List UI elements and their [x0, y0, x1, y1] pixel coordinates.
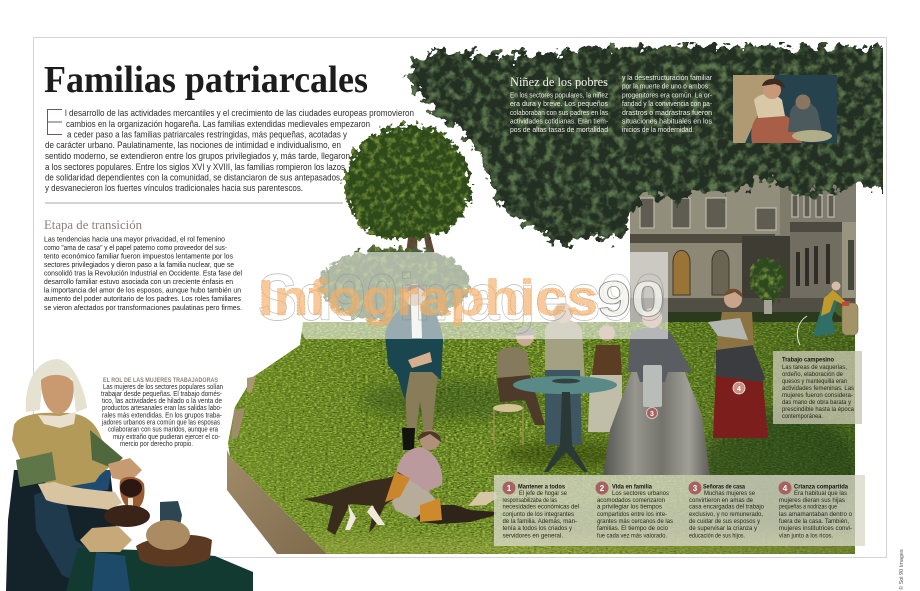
box: Trabajo campesino: [773, 351, 862, 424]
body: trabajar desde pequeñas. El trabajo domés-: [101, 391, 222, 398]
box body: das mano de obra barata y: [782, 399, 852, 406]
item 4: Crianza compartida: vían junto a los ricos.: [779, 532, 833, 540]
item 2: Vida en familia: familias. El tiempo de ocio: [597, 525, 668, 532]
section body: consolidó tras la Revolución Industrial en Occidente. Esta fase del: [44, 268, 242, 278]
pan: [104, 505, 150, 527]
item 3: Señoras de casa: educación de sus hijos.: [689, 532, 745, 540]
section body: aumento del poder autoritario de los padres. Los roles familiares: [44, 294, 241, 303]
soil cliff: [227, 376, 327, 554]
item 4: Crianza compartida: mujeres institutrices convi-: [779, 525, 852, 532]
box body: Las tareas de vaquerías,: [782, 364, 847, 371]
item 3: Señoras de casa: [688, 482, 764, 540]
item 1: Mantener a todos: conjunto de los integrantes: [502, 511, 575, 518]
skirt: [6, 470, 118, 591]
section body: se vieron afectados por transformaciones paulatinas pero firmes.: [44, 303, 242, 312]
item 2: Vida en familia: 2: [600, 484, 605, 493]
box body: [782, 364, 855, 420]
item 4: Crianza compartida: pequeñas a nodrizas que: [779, 504, 837, 511]
column two: progenitores era común. La or-: [622, 90, 713, 100]
item 1: Mantener a todos: El jefe de hogar se: [519, 490, 567, 497]
section body: Las tendencias hacia una mayor privacidad, el rol femenino: [44, 234, 225, 244]
item 2: Vida en familia: Vida en familia: [612, 484, 652, 490]
box body: mujeres fueron considera-: [782, 392, 853, 399]
box body: actividades femeninas. Las: [782, 385, 855, 392]
bushes along the wall: [668, 258, 858, 325]
box body: prescindible hasta la época: [782, 406, 854, 413]
item 3: Señoras de casa: exclusivo, y no remunerado,: [689, 511, 763, 518]
intro text block: a ceder paso a las familias patriarcales restringidas, más pequeñas, acotadas y: [67, 130, 347, 140]
item 3: Señoras de casa: 3: [693, 484, 698, 493]
watermark: translucent band: [296, 252, 668, 339]
painting: mother and child: [733, 75, 837, 143]
box: Trabajo campesino: Trabajo campesino: [782, 356, 834, 364]
item 3: Señoras de casa: convirtieron en amas de: [689, 497, 753, 504]
man standing: [385, 284, 443, 450]
basket: [136, 535, 212, 567]
drop cap: [48, 110, 62, 134]
body: tico, las actividades de hilado o la venta de: [102, 398, 222, 405]
item 4: Crianza compartida: 4: [783, 484, 788, 493]
item 1: Mantener a todos: Mantener a todos: [518, 484, 565, 490]
item 1: Mantener a todos: tenía a todos los criados y: [502, 525, 573, 532]
item 4: Crianza compartida: fuera de la casa. También,: [779, 518, 849, 525]
lawn: [228, 322, 900, 556]
intro text block: cambios en la organización hogareña. Las familias extendidas medievales empezaron: [66, 119, 370, 129]
item 1: Mantener a todos: necesidades económicas del: [502, 504, 579, 511]
column two: drastros o madrastras fueron: [622, 108, 712, 117]
body: [101, 384, 223, 448]
section body: [44, 234, 242, 312]
item 1: Mantener a todos: responsabilizaba de las: [502, 497, 558, 504]
column one: colaboraban con sus padres en las: [510, 108, 608, 117]
section body: la importancia del amor de los esposos, aunque hubo también un: [44, 286, 241, 294]
section heading: Etapa de transición: [44, 217, 142, 232]
arched windows: [673, 240, 854, 295]
item 3: Señoras de casa: casa encargadas del trabajo: [689, 504, 764, 511]
section: El rol de las mujeres trabajadoras: [101, 377, 223, 448]
body: muy extraño que pudieran ejercer el co-: [113, 434, 220, 441]
item 3: Señoras de casa: de supervisar la crianza y: [689, 525, 758, 532]
item 4: Crianza compartida: Era habitual que las: [794, 490, 848, 497]
intro text block: l desarrollo de las actividades mercantiles y el crecimiento de las ciudades europeas promovieron: [65, 108, 414, 118]
illustration: garden scene: [227, 46, 900, 556]
section: Niñez de los pobres: [510, 73, 713, 134]
blue pitcher: [160, 501, 182, 526]
section body: como "ama de casa" y el papel paterno como proveedor del sus-: [44, 243, 227, 252]
item 1: Mantener a todos: 1: [507, 484, 512, 493]
box: four family roles: [494, 475, 865, 546]
item 2: Vida en familia: a privilegiar los tiempos: [597, 504, 663, 511]
item 2: Vida en familia: Los sectores urbanos: [612, 490, 670, 497]
box body: ordeño, elaboración de: [782, 371, 843, 378]
bodice: [12, 413, 120, 488]
item 1: Mantener a todos: de la familia. Además, man-: [502, 518, 577, 525]
table: [66, 548, 253, 591]
background hedges: [320, 247, 470, 323]
column one: En los sectores populares, la niñez: [510, 90, 608, 100]
title: Familias patriarcales: [44, 59, 368, 101]
section: Etapa de transición: [44, 217, 242, 312]
item 2: Vida en familia: [596, 482, 674, 540]
box body: quesos y mantequilla eran: [782, 378, 847, 385]
pointer arrow: [797, 316, 807, 345]
column one: pos de altas tasas de mortalidad: [510, 125, 608, 134]
woman in grey dress: [603, 308, 710, 475]
woman in red dress: 4: [737, 386, 741, 393]
illustration: milkmaid: [6, 359, 253, 591]
heading: EL ROL DE LAS MUJERES TRABAJADORAS: [103, 377, 218, 384]
body: jadores urbanos era común que las esposas: [101, 420, 220, 426]
girl and dogs: [302, 430, 497, 535]
section body: desarrollo familiar estuvo asociada con un creciente énfasis en: [44, 277, 233, 286]
body: rales más extendidas. En los grupos traba-: [102, 412, 222, 420]
sleeves: [16, 452, 56, 487]
intro text block: de carácter urbano. Paulatinamente, las nociones de intimidad e individualismo, en: [45, 140, 341, 150]
item 4: Crianza compartida: mujeres dieran sus hijas: [779, 497, 846, 504]
intro text block: [45, 108, 414, 193]
column two: por la muerte de uno o ambos: [622, 82, 708, 90]
section body: tento económico familiar fueron impuestos lentamente por los: [44, 252, 233, 260]
item 2: Vida en familia: grantes más cercanos de las: [597, 518, 674, 525]
column one: actividades cotidianas. Eran tiem-: [510, 116, 609, 126]
watermark text: 90: [597, 271, 665, 327]
jug: [120, 477, 144, 510]
arms: [38, 482, 122, 510]
column two: situaciones habituales en los: [622, 116, 712, 126]
woman in red dress: [708, 289, 768, 438]
face: [41, 375, 74, 414]
item 4: Crianza compartida: [778, 482, 852, 540]
item 4: Crianza compartida: las amamantaban dentro o: [779, 511, 852, 518]
canopy: [410, 46, 890, 250]
heading: Niñez de los pobres: [510, 74, 608, 89]
building windows: [640, 195, 834, 230]
woman in grey dress: 3: [650, 411, 654, 418]
item 4: Crianza compartida: Crianza compartida: [794, 484, 848, 490]
intro text block: y desvanecieron los fuertes vínculos tradicionales hacia sus parentescos.: [45, 183, 303, 193]
item 1: Mantener a todos: servidores en general.: [502, 532, 563, 540]
intro text block: sentido moderno, se extendieron entre los grupos privilegiados y, más tarde, llegaron: [45, 151, 350, 161]
body: colaboraran con sus maridos, aunque era: [108, 426, 218, 434]
body: productos artesanales eran las salidas labo-: [102, 405, 222, 412]
bonnet: [26, 359, 87, 412]
item 1: Mantener a todos: [502, 482, 579, 540]
column one: [510, 90, 609, 134]
item 3: Señoras de casa: de cuidar de sus esposos y: [689, 518, 761, 525]
item 2: Vida en familia: fue cada vez más valorado.: [597, 532, 667, 540]
intro text block: a los sectores populares. Entre los siglos XVI y XVIII, las familias rompieron los lazos: [45, 162, 345, 172]
column two: fandad y la convivencia con pa-: [622, 99, 713, 108]
section body: sectores privilegiados y dieron paso a la familia nuclear, que se: [44, 260, 234, 269]
image credit: © Sol 90 Images: [898, 549, 905, 590]
column one: era dura y breve. Los pequeños: [510, 99, 608, 108]
box body: contemporánea.: [782, 413, 823, 420]
building: [630, 150, 858, 326]
seated figure and table: [493, 303, 622, 472]
bread: [80, 526, 132, 552]
column two: [622, 73, 713, 134]
left tree: [345, 125, 470, 262]
item 2: Vida en familia: compartidos entre los inte-: [597, 511, 667, 518]
item 2: Vida en familia: acomodados comenzaron: [597, 497, 665, 504]
watermark text: Infographics: [258, 270, 598, 326]
intro text block: de solidaridad dependientes con la comunidad, se distanciaron de sus antepasados: [45, 172, 340, 182]
gardener figure: [813, 282, 858, 337]
item 3: Señoras de casa: Señoras de casa: [703, 484, 745, 490]
column two: y la desestructuración familiar: [622, 73, 713, 82]
body: Las mujeres de los sectores populares solían: [103, 384, 223, 391]
watermark text: Sd90images90: [258, 260, 666, 334]
item 3: Señoras de casa: Muchas mujeres se: [704, 490, 755, 497]
column two: inicios de la modernidad.: [622, 125, 694, 134]
body: mercio por derecho propio.: [120, 441, 193, 448]
